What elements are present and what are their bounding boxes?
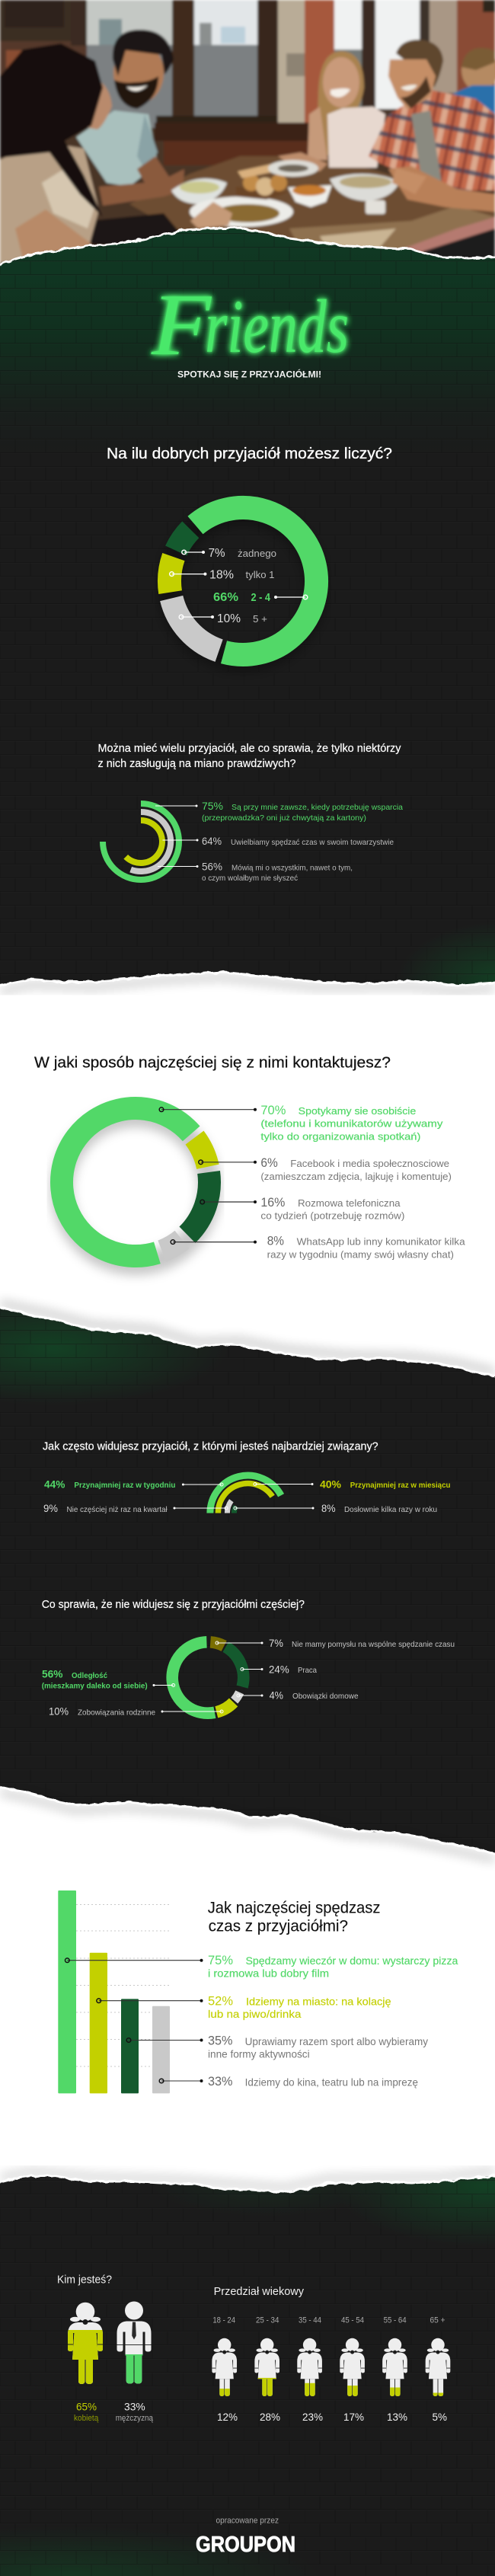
age group labels: 65 +: [430, 2316, 445, 2325]
contact legend: 16%: [260, 1195, 285, 1210]
age percentages: [217, 2411, 447, 2423]
contact legend: [159, 1103, 465, 1260]
icon: age 65+: [426, 2338, 450, 2396]
bar chart legend: Idziemy do kina, teatru lub na imprezę: [245, 2076, 418, 2089]
bar chart legend: Idziemy na miasto: na kolację: [246, 1996, 391, 2008]
age group labels: 35 - 44: [299, 2316, 321, 2325]
reasons legend: 4%: [270, 1689, 283, 1702]
title: Friends neon sign: F: [151, 276, 212, 373]
gender labels: kobietą: [74, 2414, 99, 2423]
bar chart legend: 33%: [208, 2074, 233, 2089]
heading: true friends: Można mieć wielu przyjaciół, ale co sprawia, że tylko niektórzy: [97, 742, 401, 755]
icon: age 35-44: [297, 2338, 322, 2396]
radial bars legend: Są przy mnie zawsze, kiedy potrzebuję wsparcia: [232, 803, 403, 812]
torn paper edge: white to dark: [0, 1308, 495, 1376]
gender labels: [74, 2401, 154, 2423]
reasons legend: Obowiązki domowe: [292, 1692, 359, 1701]
donut legend: 66%: [213, 591, 238, 604]
donut legend: 10%: [217, 612, 241, 625]
subtitle: SPOTKAJ SIĘ Z PRZYJACIÓŁMI!: [177, 369, 321, 379]
age group labels: 45 - 54: [341, 2316, 364, 2325]
donut chart: contact methods: [62, 1108, 209, 1264]
age percentages: 5%: [433, 2411, 447, 2423]
contact legend: co tydzień (potrzebuję rozmów): [260, 1210, 404, 1222]
icon: age 45-54: [340, 2338, 365, 2396]
contact legend: WhatsApp lub inny komunikator kilka: [297, 1235, 465, 1248]
dark brick section: intro and friends statistics: [0, 228, 495, 1044]
gender labels: 65%: [76, 2401, 97, 2413]
contact legend: 8%: [267, 1234, 284, 1248]
frequency legend: 9%: [43, 1502, 58, 1514]
heading: how do you spend time: Jak najczęściej spędzasz: [208, 1900, 381, 1916]
heading: true friends: [97, 742, 401, 770]
age group labels: 55 - 64: [384, 2316, 407, 2325]
donut legend: [170, 547, 308, 625]
radial bars legend: 75%: [202, 800, 223, 812]
contact legend: (telefonu i komunikatorów używamy: [260, 1118, 443, 1129]
torn paper edge: white to dark: [0, 2175, 495, 2192]
reasons legend: [42, 1637, 455, 1717]
age group labels: 18 - 24: [212, 2316, 235, 2325]
man in plaid: [369, 90, 495, 190]
torn paper edge: dark to white: [0, 1787, 495, 1859]
far woman: [317, 51, 364, 156]
radial bars legend: Mówią mi o wszystkim, nawet o tym,: [232, 864, 353, 873]
reasons legend: Zobowiązania rodzinne: [78, 1708, 155, 1717]
reasons legend: (mieszkamy daleko od siebie): [42, 1682, 148, 1691]
bar chart legend: i rozmowa lub dobry film: [208, 1967, 329, 1979]
contact legend: 6%: [260, 1155, 278, 1170]
bar chart legend: lub na piwo/drinka: [208, 2008, 302, 2020]
reasons legend: 10%: [49, 1705, 69, 1717]
age percentages: 23%: [302, 2411, 323, 2423]
reasons legend: Nie mamy pomysłu na wspólne spędzanie czasu: [292, 1640, 455, 1649]
heading: how often do you see friends: Jak często widujesz przyjaciół, z którymi jesteś najbardziej związany?: [43, 1440, 378, 1453]
reasons legend: Praca: [298, 1666, 317, 1675]
bar chart legend: 52%: [208, 1994, 233, 2008]
heading: true friends: z nich zasługują na miano prawdziwych?: [97, 757, 295, 770]
radial bars: what makes true friends: [103, 804, 179, 880]
heading: how do you spend time: czas z przyjaciółmi?: [209, 1918, 348, 1935]
title: Friends neon sign: riends: [205, 284, 349, 369]
radial bars legend: [155, 800, 403, 883]
reasons legend: 24%: [269, 1664, 289, 1676]
reasons legend: 7%: [269, 1637, 283, 1649]
donut legend: 7%: [209, 547, 225, 560]
frequency legend: 40%: [320, 1478, 342, 1490]
age group labels: 25 - 34: [256, 2316, 279, 2325]
radial bars legend: (przeprowadzka? oni już chwytają za kartony): [202, 813, 366, 823]
bar chart legend: inne formy aktywności: [208, 2047, 310, 2060]
woman with dark hair: [0, 141, 99, 263]
icon: age 25-34: [254, 2338, 279, 2396]
gender labels: mężczyzną: [116, 2414, 154, 2423]
contact legend: (zamieszczam zdjęcia, lajkuję i komentuje): [260, 1171, 452, 1182]
contact legend: Rozmowa telefoniczna: [298, 1197, 401, 1209]
donut legend: 2 - 4: [251, 591, 271, 604]
frequency legend: Dosłownie kilka razy w roku: [344, 1505, 437, 1514]
radial bars legend: o czym wolałbym nie słyszeć: [202, 874, 298, 883]
reasons legend: Odległość: [72, 1671, 107, 1680]
bar chart: how friends spend time: [58, 1890, 171, 2093]
heading: how do you spend time: [208, 1900, 381, 1935]
heading: who are you: Kim jesteś?: [57, 2273, 112, 2287]
dark brick section: demographics and footer: [0, 2125, 495, 2576]
donut chart: reasons: [172, 1642, 244, 1713]
donut legend: 18%: [209, 568, 234, 582]
frequency legend: 8%: [321, 1502, 336, 1514]
bearded man: [76, 110, 158, 187]
age percentages: 13%: [387, 2411, 407, 2423]
contact legend: tylko do organizowania spotkań): [260, 1130, 420, 1143]
radial bars legend: Uwielbiamy spędzać czas w swoim towarzystwie: [231, 838, 394, 847]
bar chart legend: 75%: [208, 1953, 233, 1967]
gender labels: 33%: [124, 2401, 145, 2413]
heading: how do you contact them: W jaki sposób najczęściej się z nimi kontaktujesz?: [34, 1054, 391, 1071]
semi-circular bars: meeting frequency: [210, 1475, 281, 1513]
contact legend: Spotykamy sie osobiście: [299, 1105, 416, 1117]
icon: age 18-24: [212, 2338, 237, 2396]
bar chart legend: Uprawiamy razem sport albo wybieramy: [245, 2035, 428, 2047]
bar chart legend: 35%: [208, 2034, 233, 2047]
icon: age 55-64: [382, 2338, 407, 2396]
plates and food: [171, 178, 227, 204]
torn paper edge: top: [0, 228, 495, 265]
photo: friends eating at a pub table: [0, 0, 495, 264]
donut legend: tylko 1: [245, 569, 274, 580]
donut legend: żadnego: [238, 548, 276, 559]
icon: man gender share: [117, 2302, 151, 2384]
reasons legend: 56%: [42, 1668, 63, 1680]
heading: why not more often: Co sprawia, że nie widujesz się z przyjaciółmi częściej?: [42, 1598, 305, 1611]
torn paper edge: dark to white: [0, 972, 495, 991]
frequency legend: [43, 1478, 451, 1514]
icon: woman gender share: [68, 2303, 103, 2384]
frequency legend: Nie częściej niż raz na kwartał: [67, 1505, 168, 1514]
frequency legend: 44%: [44, 1478, 65, 1490]
age percentages: 17%: [343, 2411, 364, 2423]
radial bars legend: 64%: [202, 835, 222, 847]
age percentages: 28%: [260, 2411, 280, 2423]
radial bars legend: 56%: [202, 861, 222, 873]
frequency legend: Przynajmniej raz w miesiącu: [350, 1481, 451, 1490]
bar chart legend: Spędzamy wieczór w domu: wystarczy pizza: [245, 1954, 458, 1967]
age percentages: 12%: [217, 2411, 238, 2423]
logo: Groupon wordmark: GROUPON: [196, 2533, 295, 2557]
heading: how many friends: Na ilu dobrych przyjaciół możesz liczyć?: [107, 446, 392, 462]
donut legend: 5 +: [253, 613, 267, 625]
dark brick section: frequency and reasons: [0, 1291, 495, 1854]
heading: age range: Przedział wiekowy: [214, 2285, 304, 2298]
title: Friends neon sign: [151, 276, 349, 373]
footer credit: opracowane przez: [216, 2517, 279, 2526]
back man: [460, 58, 495, 88]
contact legend: razy w tygodniu (mamy swój własny chat): [267, 1249, 454, 1260]
age group labels: [212, 2316, 445, 2325]
contact legend: Facebook i media społecznosciowe: [290, 1158, 449, 1169]
contact legend: 70%: [260, 1103, 286, 1117]
table: [129, 155, 495, 238]
donut chart: number of friends: [169, 508, 317, 661]
bar chart legend: [65, 1953, 458, 2089]
frequency legend: Przynajmniej raz w tygodniu: [74, 1481, 175, 1490]
